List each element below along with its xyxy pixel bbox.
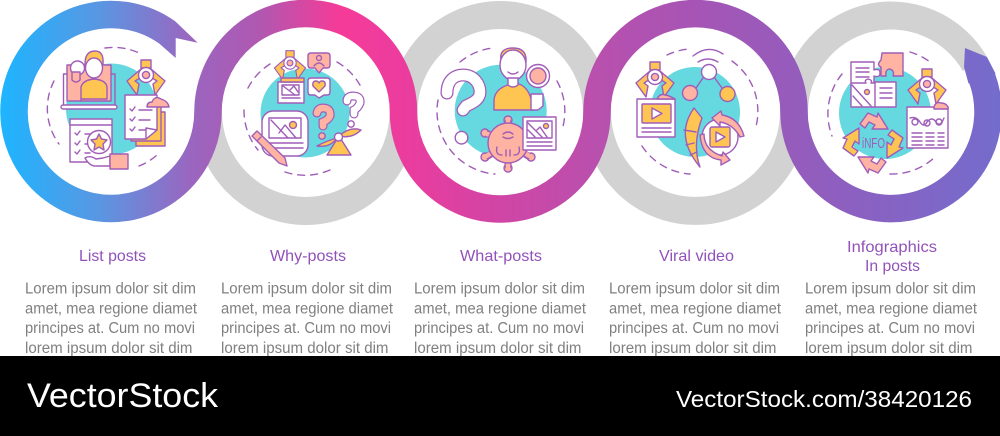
text block: what-posts: amet, mea regione diamet <box>414 300 587 317</box>
text block: why-posts: principes at. Cum no movi <box>221 320 391 337</box>
icon: infographics in posts: iNFO <box>862 135 885 152</box>
text block: infographics in posts: amet, mea regione diamet <box>805 300 978 317</box>
text block: why-posts: lorem ipsum dolor sit dim <box>221 340 388 357</box>
grey ring segments <box>208 15 975 211</box>
heading: what-posts: What-posts <box>460 248 542 265</box>
text block: infographics in posts: Lorem ipsum dolor sit dim <box>805 280 976 298</box>
gradient ribbon with arrow <box>14 14 996 209</box>
icon: why-posts <box>244 51 361 175</box>
logo wordmark: VectorStock <box>27 377 219 415</box>
text block: infographics in posts: lorem ipsum dolor sit dim <box>805 340 972 357</box>
icon: what-posts <box>437 48 565 174</box>
text block: infographics in posts: principes at. Cum no movi <box>805 320 975 337</box>
image url: VectorStock.com/38420126 <box>676 386 972 412</box>
text block: why-posts: amet, mea regione diamet <box>221 300 394 317</box>
text block: list posts <box>25 280 198 357</box>
heading: infographics in posts: In posts <box>865 258 920 275</box>
text block: what-posts: lorem ipsum dolor sit dim <box>414 340 582 357</box>
text block: what-posts: principes at. Cum no movi <box>414 320 584 337</box>
watermark bar <box>0 356 1000 436</box>
heading: infographics in posts <box>847 239 937 275</box>
text block: why-posts <box>221 280 394 357</box>
text block: list posts: lorem ipsum dolor sit dim <box>25 340 192 357</box>
text block: list posts: amet, mea regione diamet <box>25 300 198 317</box>
text block: viral video: amet, mea regione diamet <box>609 300 782 317</box>
icon: infographics in posts <box>828 52 948 174</box>
heading: why-posts: Why-posts <box>270 248 346 265</box>
text block: viral video <box>609 280 782 357</box>
heading: infographics in posts: Infographics <box>847 239 937 256</box>
text block: what-posts <box>414 280 587 357</box>
icon: list posts <box>47 47 169 169</box>
text block: list posts: Lorem ipsum dolor sit dim <box>25 280 196 298</box>
text block: viral video: lorem ipsum dolor sit dim <box>609 340 776 357</box>
heading: viral video: Viral video <box>659 248 734 265</box>
text block: viral video: Lorem ipsum dolor sit dim <box>609 280 780 298</box>
text block: what-posts: Lorem ipsum dolor sit dim <box>414 280 585 298</box>
text block: infographics in posts <box>805 280 978 357</box>
heading: list posts: List posts <box>79 248 146 265</box>
text block: viral video: principes at. Cum no movi <box>609 320 779 337</box>
icon: viral video <box>636 49 758 174</box>
text block: list posts: principes at. Cum no movi <box>25 320 195 337</box>
text block: why-posts: Lorem ipsum dolor sit dim <box>221 280 392 298</box>
